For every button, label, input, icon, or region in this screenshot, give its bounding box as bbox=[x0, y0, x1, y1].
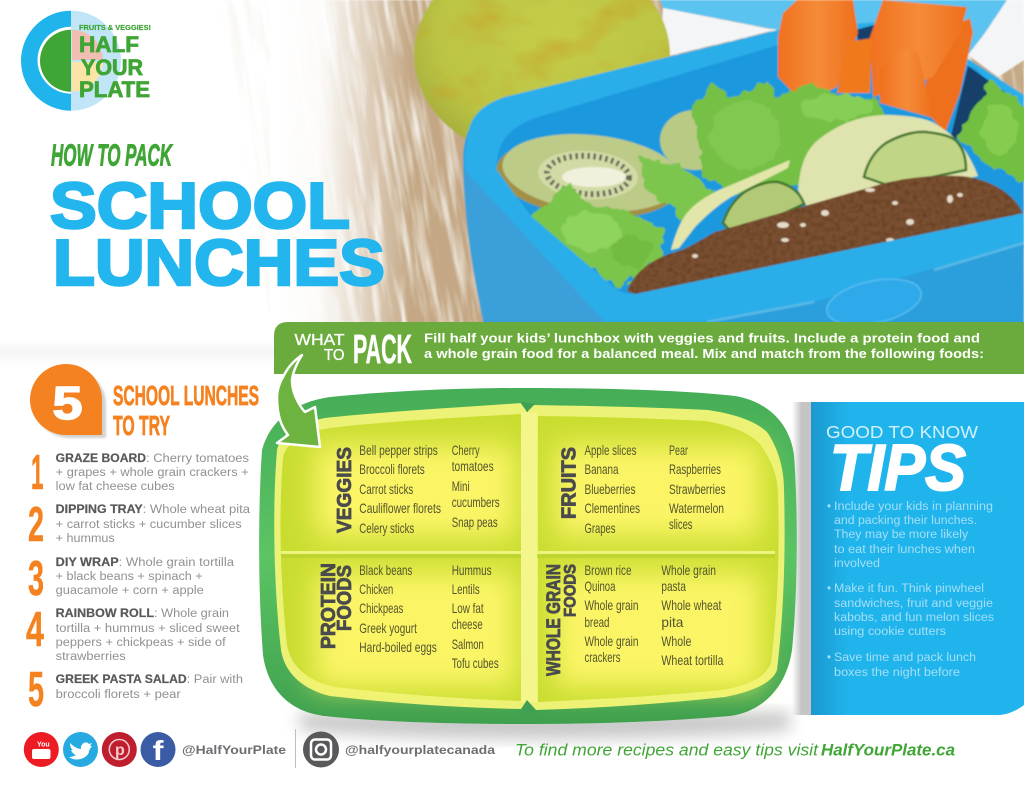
cell: veggies: Carrot sticks bbox=[359, 481, 413, 497]
icon: youtube: You bbox=[37, 742, 50, 748]
cell: whole grain foods: Brown rice bbox=[584, 562, 632, 578]
item 4 bbox=[26, 603, 241, 663]
icon: instagram bbox=[303, 732, 339, 768]
cell: veggies: Bell pepper strips bbox=[359, 442, 438, 458]
icon: twitter bbox=[63, 732, 98, 767]
icon: pinterest bbox=[102, 732, 137, 767]
cell: veggies: Mini bbox=[452, 478, 470, 494]
drop shadow bbox=[300, 712, 790, 739]
icon: facebook bbox=[140, 732, 176, 767]
foods bbox=[492, 80, 1024, 296]
white and blue lid behind the box bbox=[660, 0, 1024, 77]
cell: fruits: Watermelon bbox=[669, 500, 724, 516]
badge: 5 bbox=[52, 377, 82, 429]
item 3: guacamole + corn + apple bbox=[56, 585, 204, 597]
lunchbox illustration bbox=[259, 388, 811, 739]
item 2: 2 bbox=[28, 498, 44, 552]
tip 3: • bbox=[827, 652, 831, 664]
cell: veggies: Snap peas bbox=[452, 514, 498, 530]
banner: what to pack: PACK bbox=[353, 326, 412, 372]
tip 2: kabobs, and fun melon slices bbox=[834, 612, 994, 624]
item 4: strawberries bbox=[56, 651, 126, 663]
tip 1: to eat their lunches when bbox=[834, 544, 975, 556]
footer: social and website bbox=[24, 729, 955, 768]
hero photo: lunchbox on wood bbox=[220, 0, 1024, 333]
icon: pinterest: p bbox=[115, 742, 125, 759]
cell: whole grain foods: FOODS bbox=[560, 564, 580, 617]
cell: fruits: Blueberries bbox=[584, 481, 636, 497]
kicker: HOW TO PACK bbox=[51, 138, 173, 172]
left tray interior bbox=[280, 414, 521, 701]
headline line 2: LUNCHES bbox=[53, 226, 385, 299]
item 2: DIPPING TRAY bbox=[56, 504, 143, 516]
right lettuce bbox=[958, 80, 1024, 187]
item 1 bbox=[31, 446, 249, 500]
item 1: : Cherry tomatoes bbox=[146, 453, 249, 465]
item 5 bbox=[28, 663, 243, 717]
banner: what to pack: TO bbox=[324, 347, 344, 364]
cell: whole grain foods: WHOLE GRAIN bbox=[544, 564, 565, 676]
item 3: : Whole grain tortilla bbox=[119, 557, 235, 569]
tip 2 bbox=[827, 583, 994, 638]
cell: fruits: Pear bbox=[669, 442, 688, 458]
logo: Half Your Plate: YOUR bbox=[81, 55, 143, 80]
item 4: 4 bbox=[26, 603, 44, 657]
cell: protein foods: Hard-boiled eggs bbox=[359, 639, 437, 655]
panel heading: GOOD TO KNOW bbox=[826, 422, 979, 442]
cell: whole grain foods: Whole bbox=[661, 633, 692, 649]
item 2 bbox=[28, 498, 251, 552]
cell: fruits: FRUITS bbox=[558, 447, 580, 519]
footer: social and website: HalfYourPlate.ca bbox=[821, 740, 955, 760]
panel: good to know tips bbox=[811, 402, 1024, 715]
item 3: 3 bbox=[28, 552, 44, 606]
cell: protein foods: cheese bbox=[452, 616, 483, 632]
item 5: broccoli florets + pear bbox=[56, 689, 181, 701]
item 2: + hummus bbox=[56, 533, 115, 545]
cell: protein foods bbox=[318, 562, 499, 671]
cell: whole grain foods: bread bbox=[584, 614, 610, 630]
cheese slice bbox=[798, 115, 978, 212]
item 2: + carrot sticks + cucumber slices bbox=[56, 519, 242, 531]
item 5: GREEK PASTA SALAD bbox=[56, 674, 187, 686]
cell: veggies: cucumbers bbox=[452, 494, 500, 510]
logo: Half Your Plate bbox=[21, 11, 151, 111]
cucumber front bbox=[723, 182, 804, 236]
item 1: + grapes + whole grain crackers + bbox=[56, 467, 249, 479]
right tray interior bbox=[538, 416, 779, 702]
cell: veggies: tomatoes bbox=[452, 458, 494, 474]
cell: fruits: Grapes bbox=[584, 520, 616, 536]
cell: fruits bbox=[558, 442, 726, 536]
cell: whole grain foods: Whole grain bbox=[584, 633, 638, 649]
item 4: : Whole grain bbox=[154, 608, 229, 620]
cheese strip bbox=[671, 160, 790, 250]
back kiwi bbox=[658, 109, 704, 172]
section: 5 school lunches to try: TO TRY bbox=[113, 410, 170, 441]
tip 3: Save time and pack lunch bbox=[834, 652, 976, 664]
tip 1: • bbox=[827, 501, 831, 513]
latch button bbox=[826, 278, 922, 322]
icon: youtube bbox=[24, 732, 59, 767]
banner: what to pack bbox=[274, 322, 1024, 374]
cell: protein foods: Chickpeas bbox=[359, 600, 403, 616]
tip 2: Make it fun. Think pinwheel bbox=[834, 583, 984, 595]
logo: Half Your Plate: HALF bbox=[79, 32, 139, 57]
kiwi slice bbox=[495, 132, 674, 217]
cell: fruits: Raspberries bbox=[669, 461, 721, 477]
item 4: peppers + chickpeas + side of bbox=[56, 637, 227, 649]
tip 1: involved bbox=[834, 558, 880, 570]
bread roll bbox=[627, 176, 1024, 296]
cell: whole grain foods: pasta bbox=[661, 578, 686, 594]
tip 2: using cookie cutters bbox=[834, 626, 946, 638]
arrow into the lunchbox bbox=[277, 355, 320, 447]
cell: protein foods: Lentils bbox=[452, 581, 480, 597]
left tray bbox=[274, 403, 527, 709]
item 3: + black beans + spinach + bbox=[56, 571, 203, 583]
cell: protein foods: Hummus bbox=[452, 562, 492, 578]
item 4: RAINBOW ROLL bbox=[56, 608, 154, 620]
item 3 bbox=[28, 552, 235, 606]
tray floor highlights bbox=[315, 445, 760, 687]
cell: fruits: Banana bbox=[584, 461, 619, 477]
tip 1 bbox=[827, 501, 993, 570]
icon: facebook: f bbox=[152, 735, 164, 766]
heading: SCHOOL LUNCHES bbox=[113, 380, 259, 411]
item 2: : Whole wheat pita bbox=[143, 504, 251, 516]
cell: protein foods: FOODS bbox=[334, 565, 356, 631]
cucumber on cheese bbox=[864, 132, 966, 186]
handle: @HalfYourPlate bbox=[182, 743, 286, 757]
badge bbox=[30, 364, 106, 438]
tip 2: • bbox=[827, 583, 831, 595]
cell: veggies: Cauliflower florets bbox=[359, 500, 441, 516]
soft fade under the photo bbox=[0, 340, 274, 372]
cell: whole grain foods: Whole grain bbox=[584, 597, 638, 613]
cell: protein foods: PROTEIN bbox=[318, 563, 340, 649]
headline line 1: SCHOOL bbox=[50, 169, 350, 242]
item 5: 5 bbox=[28, 663, 44, 717]
tip 1: and packing their lunches. bbox=[834, 515, 977, 527]
box rim and interior bbox=[465, 22, 1024, 322]
left lettuce bbox=[527, 183, 663, 290]
cell: veggies: Cherry bbox=[452, 442, 480, 458]
logo: Half Your Plate: PLATE bbox=[79, 77, 150, 102]
cell: whole grain foods: Quinoa bbox=[584, 578, 616, 594]
centre lettuce bbox=[639, 80, 885, 232]
item 1: 1 bbox=[31, 446, 44, 500]
cell: veggies: VEGGIES bbox=[334, 447, 356, 533]
section: 5 school lunches to try bbox=[26, 364, 259, 717]
cell: veggies: Celery sticks bbox=[359, 520, 414, 536]
cell: fruits: Apple slices bbox=[584, 442, 636, 458]
item 1: low fat cheese cubes bbox=[56, 481, 175, 493]
cell: protein foods: Tofu cubes bbox=[452, 655, 499, 671]
tray dividers bbox=[281, 402, 775, 716]
title bbox=[50, 138, 385, 299]
cell: fruits: Strawberries bbox=[669, 481, 726, 497]
cell: protein foods: Greek yogurt bbox=[359, 620, 417, 636]
panel: good to know tips: TIPS bbox=[830, 431, 966, 504]
banner: what to pack: WHAT bbox=[294, 332, 345, 349]
cell: protein foods: Salmon bbox=[452, 636, 484, 652]
cell: veggies: Broccoli florets bbox=[359, 461, 425, 477]
cell: whole grain foods: Wheat tortilla bbox=[661, 652, 724, 668]
tip 3: boxes the night before bbox=[834, 667, 960, 679]
website call to action: To find more recipes and easy tips visit bbox=[515, 740, 819, 760]
carrots bbox=[778, 0, 973, 133]
cell: whole grain foods: pita bbox=[661, 614, 684, 630]
cell: whole grain foods: Whole wheat bbox=[661, 597, 721, 613]
cell: protein foods: Low fat bbox=[452, 600, 484, 616]
cell: protein foods: Black beans bbox=[359, 562, 412, 578]
wood table bbox=[220, 0, 1024, 330]
box front wall and rim bbox=[465, 169, 1024, 322]
tip 1: They may be more likely bbox=[834, 529, 968, 541]
item 4: tortilla + hummus + sliced sweet bbox=[56, 623, 241, 635]
green outer box bbox=[259, 388, 797, 724]
banner: what to pack: Fill half your kids’ lunchbox with veggies and fruits. Include a protein food and bbox=[424, 332, 980, 346]
banner: what to pack: a whole grain food for a balanced meal. Mix and match from the following foods: bbox=[424, 347, 984, 361]
cell: fruits: Clementines bbox=[584, 500, 640, 516]
tip 1: Include your kids in planning bbox=[834, 501, 993, 513]
item 3: DIY WRAP bbox=[56, 557, 119, 569]
logo: Half Your Plate: FRUITS & VEGGIES! bbox=[79, 23, 151, 32]
right shadow bbox=[792, 402, 811, 715]
cell: protein foods: Chicken bbox=[359, 581, 393, 597]
handle: @halfyourplatecanada bbox=[345, 743, 495, 757]
pear bbox=[413, 0, 671, 140]
cell: whole grain foods: Whole grain bbox=[661, 562, 716, 578]
item 1: GRAZE BOARD bbox=[56, 453, 146, 465]
right tray bbox=[528, 405, 785, 710]
tip 2: sandwiches, fruit and veggie bbox=[834, 598, 993, 610]
cell: whole grain foods bbox=[544, 562, 724, 676]
cell: whole grain foods: crackers bbox=[584, 649, 620, 665]
blue box wall bbox=[462, 30, 778, 322]
cell: veggies bbox=[334, 442, 500, 536]
item 5: : Pair with bbox=[187, 674, 243, 686]
cell: fruits: slices bbox=[669, 516, 692, 532]
tip 3 bbox=[827, 652, 976, 679]
